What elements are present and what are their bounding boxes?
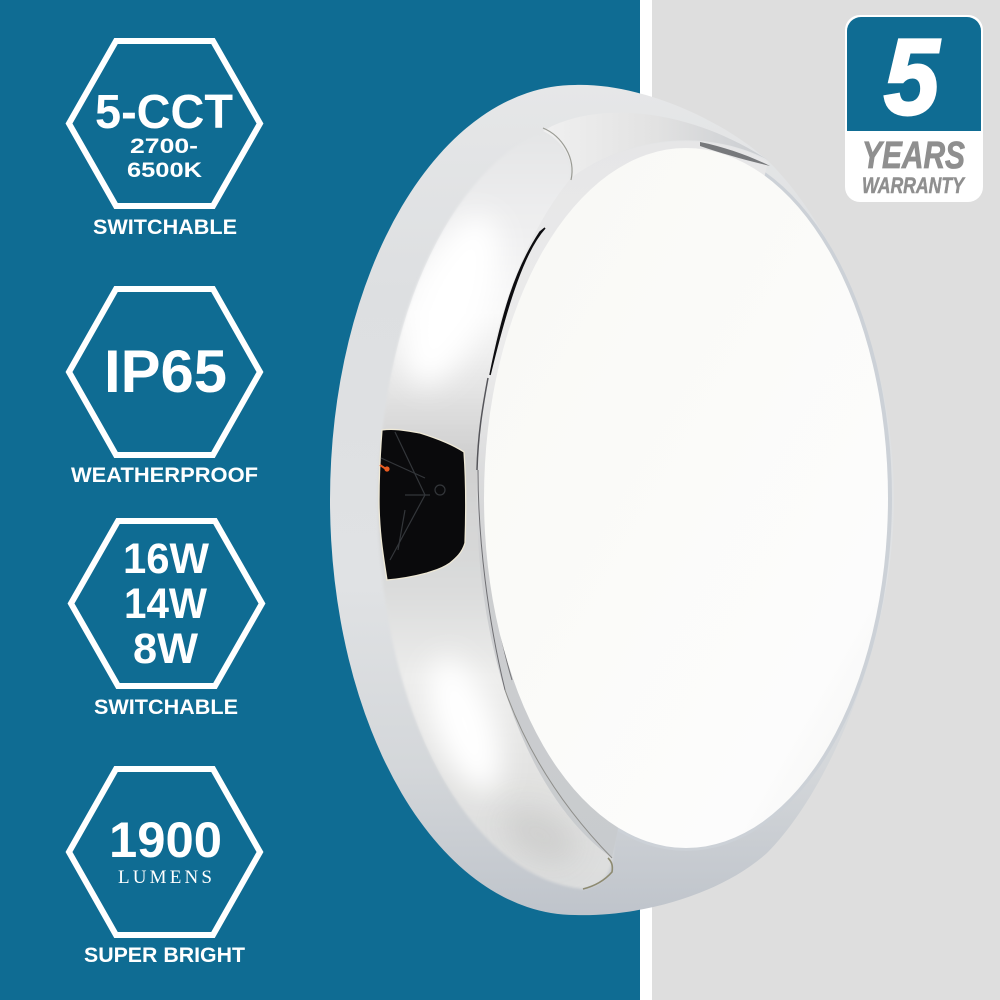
caption: SUPER BRIGHT: [84, 944, 245, 967]
lower shade: [507, 808, 572, 861]
ring behind face: [480, 145, 892, 851]
seam notch bottom: [583, 858, 612, 889]
lip highlight lines: [477, 378, 612, 858]
soft highlights on band: [400, 220, 572, 861]
hexagon outline: [69, 289, 260, 455]
feature: IP65: [69, 289, 260, 487]
unit: LUMENS: [118, 867, 212, 888]
luminous opal face: [484, 148, 888, 848]
top chrome cap: [543, 113, 768, 178]
14W value: 14W: [124, 580, 207, 628]
warranty badge: [845, 15, 983, 202]
top right chrome glint: [700, 142, 770, 166]
orange reflection spot: [380, 465, 386, 469]
chrome inner band: [378, 131, 640, 889]
caption: SWITCHABLE: [94, 696, 238, 719]
blue left panel: [0, 0, 640, 1000]
grey background panel: [652, 0, 1000, 1000]
chrome lip: [477, 141, 768, 858]
lower highlight: [425, 659, 508, 795]
main value: 5-CCT: [95, 86, 233, 139]
feature: 5-CCT: [69, 41, 260, 239]
range line two: 6500K: [127, 159, 202, 182]
hexagon outline: [69, 769, 260, 935]
8W value: 8W: [133, 625, 198, 673]
orange reflection dot: [384, 466, 390, 472]
upper highlight: [400, 220, 497, 386]
range line one: 2700-: [130, 135, 198, 158]
16W value: 16W: [123, 535, 209, 583]
fitting outer body: [330, 85, 894, 915]
caption: WEATHERPROOF: [71, 464, 258, 487]
main value: IP65: [104, 338, 227, 405]
caption: SWITCHABLE: [93, 216, 237, 239]
hexagon outline: [71, 521, 262, 686]
reflection details: [381, 432, 445, 560]
hexagon outline: [69, 41, 260, 206]
feature: wattage: [71, 521, 262, 719]
seam notch top: [543, 128, 572, 180]
number 5: 5: [884, 16, 941, 137]
dark reflection in chrome: [379, 429, 466, 580]
main value: 1900: [109, 812, 222, 868]
badge base: [845, 15, 983, 202]
warranty label: WARRANTY: [862, 173, 966, 198]
white divider strip: [640, 0, 652, 1000]
badge blue header: [847, 17, 981, 131]
feature: lumens: [69, 769, 260, 967]
chrome light fitting: [330, 85, 894, 915]
years label: YEARS: [862, 135, 965, 177]
black streak on upper lip: [490, 228, 545, 375]
